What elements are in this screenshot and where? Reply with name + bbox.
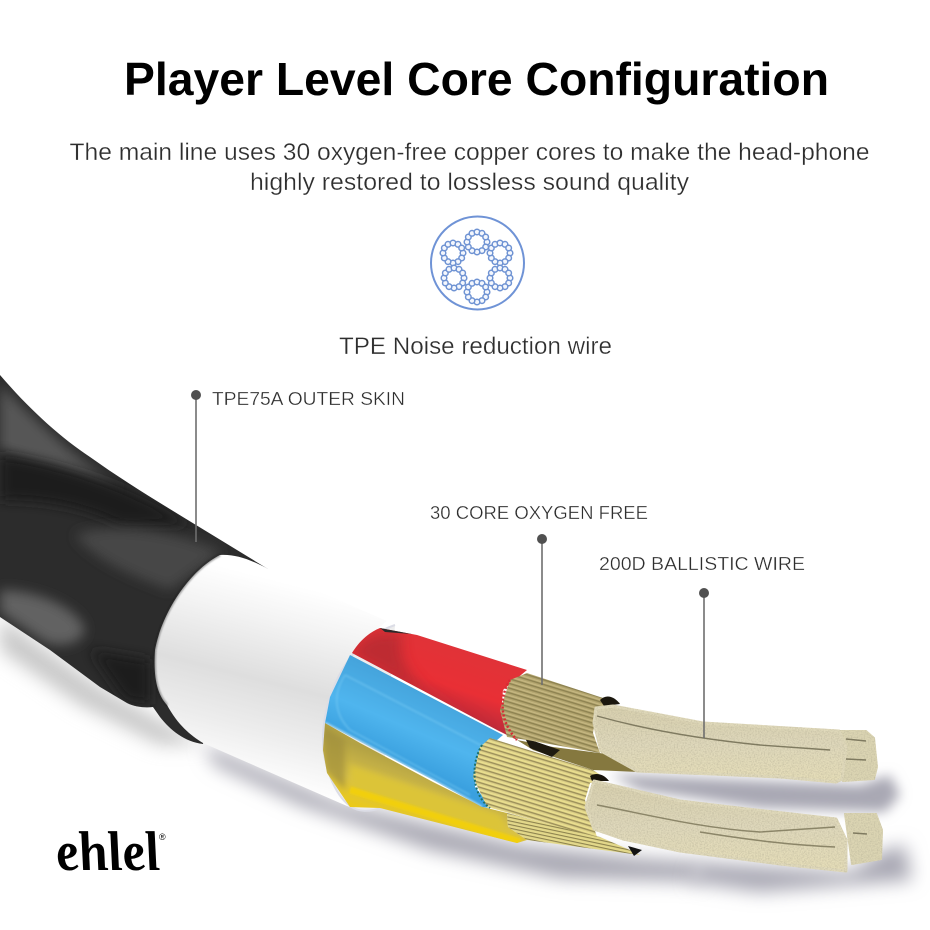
cable shadow: [0, 617, 912, 892]
copper back strands: [507, 738, 642, 856]
description text: highly restored to lossless sound quality: [250, 169, 689, 196]
back right strands: [840, 731, 882, 864]
copper lower strand: [473, 738, 608, 837]
sleeve opening lip: [323, 625, 395, 811]
logo: ehlel: ehlel: [49, 822, 166, 883]
icon: wire cross-section: [431, 216, 524, 310]
description text: The main line uses 30 oxygen-free copper cores to make the head-phone: [70, 139, 870, 166]
callout: 30 core oxygen free: [430, 503, 648, 685]
sleeve dark rim: [155, 555, 220, 705]
title: Player Level Core Configuration: [124, 53, 829, 105]
callout: 30 core oxygen free: 30 CORE OXYGEN FREE: [430, 503, 648, 523]
yellow core: [323, 723, 527, 843]
logo: ehlel: ®: [159, 832, 166, 842]
aramid strands: [586, 706, 846, 871]
cable illustration: [0, 360, 912, 892]
label: TPE noise reduction wire: TPE Noise reduction wire: [339, 333, 612, 360]
white inner sleeve: [155, 555, 387, 808]
strand grooves: [597, 716, 867, 847]
description text: [70, 139, 870, 196]
red core: [352, 628, 527, 740]
callout: 200D ballistic wire: [599, 554, 805, 738]
callout: 200D ballistic wire: 200D BALLISTIC WIRE: [599, 554, 805, 574]
copper upper strand: [500, 673, 620, 753]
black outer jacket: [0, 375, 268, 744]
callout: TPE75A outer skin: TPE75A OUTER SKIN: [212, 389, 405, 409]
blue core: [325, 655, 503, 808]
callout: TPE75A outer skin: [191, 389, 405, 542]
